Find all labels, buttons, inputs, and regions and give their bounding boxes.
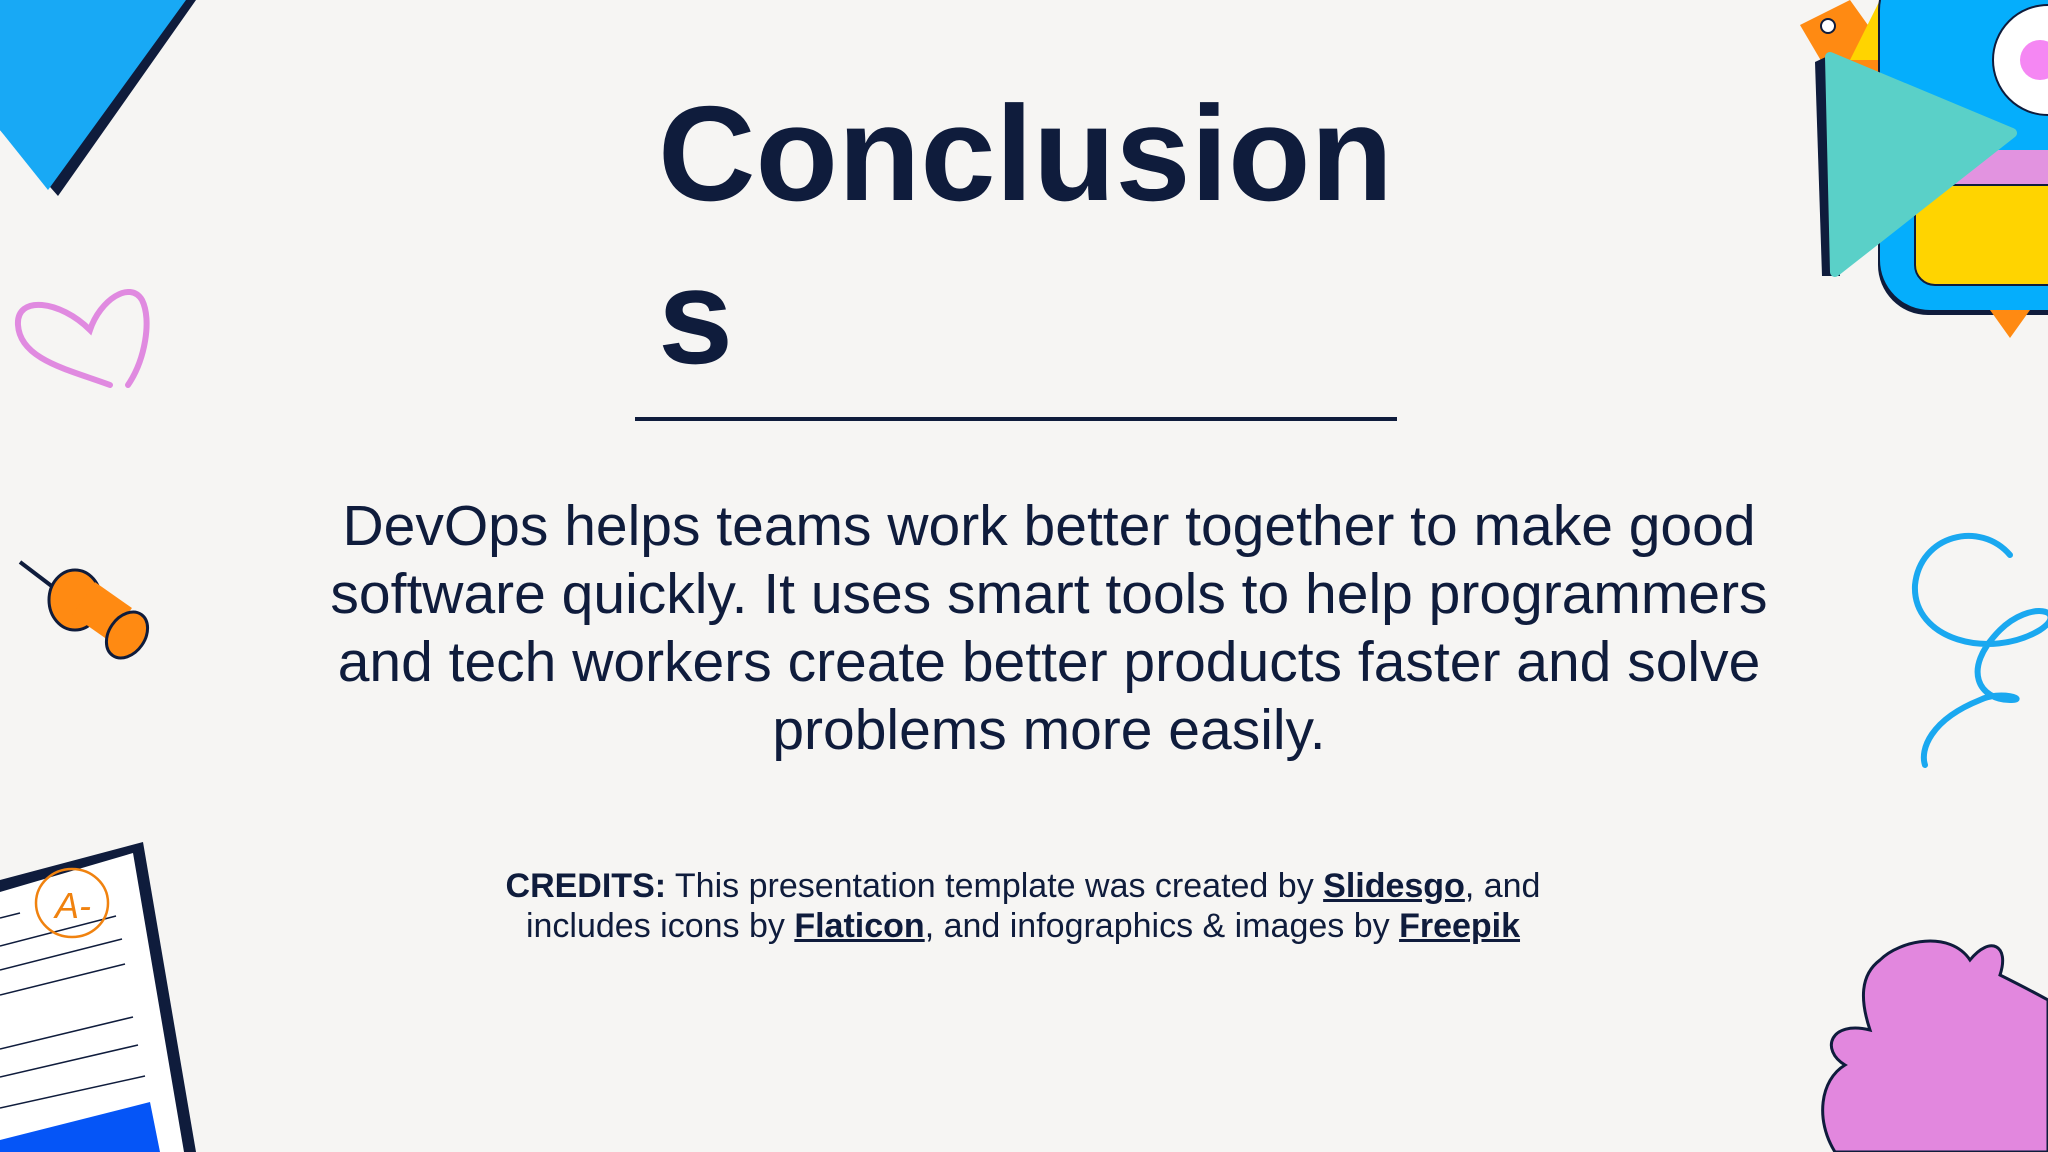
title <box>658 78 1393 392</box>
icon: orange pushpin <box>20 562 156 666</box>
title: s <box>658 241 733 392</box>
icon: pink heart <box>18 292 147 385</box>
icon: blue squiggle <box>1915 536 2048 765</box>
credits: includes icons by Flaticon, and infographics & images by Freepik <box>526 907 1520 945</box>
credits <box>506 867 1540 945</box>
icon: camera cluster <box>1800 0 2048 338</box>
body text: and tech workers create better products faster and solve <box>338 630 1760 694</box>
title: Conclusion <box>658 78 1393 229</box>
credits: CREDITS: This presentation template was created by Slidesgo, and <box>506 867 1540 905</box>
icon: pink splat <box>1823 941 2048 1152</box>
body text: problems more easily. <box>772 698 1326 762</box>
title underline <box>635 417 1397 421</box>
icon: graded paper <box>0 842 196 1152</box>
body text <box>330 494 1768 762</box>
body text: DevOps helps teams work better together to make good <box>342 494 1756 558</box>
icon: graded paper: A- <box>53 885 91 926</box>
body text: software quickly. It uses smart tools to help programmers <box>330 562 1768 626</box>
icon: blue corner shape <box>0 0 196 196</box>
